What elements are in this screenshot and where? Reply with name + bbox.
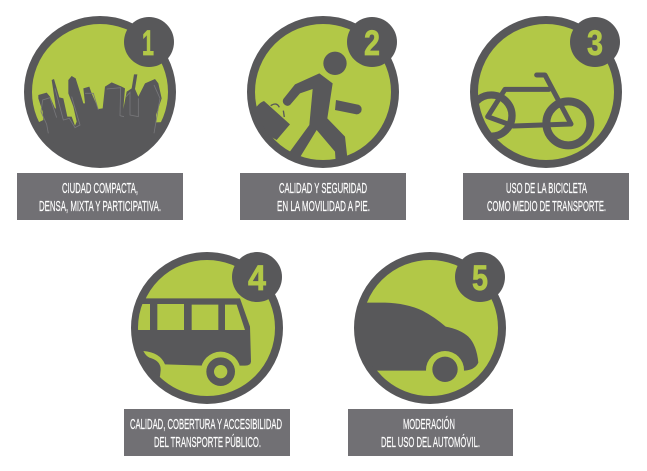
banner: transporte publico: CALIDAD, COBERTURA Y ACCESIBILIDAD xyxy=(130,416,282,433)
badge: number 1: 1 xyxy=(142,24,154,63)
banner: bicicleta xyxy=(463,173,629,220)
badge: number 1 xyxy=(124,17,174,67)
panel 5: automovil xyxy=(348,252,513,456)
banner: automovil: DEL USO DEL AUTOMÓVIL. xyxy=(381,434,480,451)
badge: number 2: 2 xyxy=(364,24,380,63)
icon: bicycle xyxy=(471,20,618,164)
badge: number 5 xyxy=(455,252,505,302)
badge: number 3 xyxy=(570,17,620,67)
banner: movilidad a pie: CALIDAD Y SEGURIDAD xyxy=(279,180,367,197)
icon: walking person with briefcase xyxy=(250,20,395,167)
panel 2: movilidad a pie xyxy=(240,17,406,220)
banner: transporte publico xyxy=(124,409,290,456)
panel 3: bicicleta xyxy=(463,17,629,220)
icon: bus xyxy=(128,256,279,400)
icon: city skyline in circle xyxy=(27,20,173,172)
icon: car xyxy=(352,256,502,400)
badge: number 3: 3 xyxy=(587,24,603,63)
badge: number 4: 4 xyxy=(248,259,266,298)
badge: number 2 xyxy=(347,17,397,67)
banner: automovil xyxy=(348,409,513,456)
banner: ciudad compacta xyxy=(17,173,183,220)
banner: transporte publico: DEL TRANSPORTE PÚBLICO. xyxy=(154,434,261,451)
banner: ciudad compacta: DENSA, MIXTA Y PARTICIPATIVA. xyxy=(39,198,161,215)
banner: movilidad a pie xyxy=(240,173,406,220)
badge: number 5: 5 xyxy=(472,259,488,298)
panel 4: transporte publico xyxy=(124,252,290,456)
banner: ciudad compacta: CIUDAD COMPACTA, xyxy=(62,180,138,197)
banner: movilidad a pie: EN LA MOVILIDAD A PIE. xyxy=(277,198,370,215)
panel 1: ciudad compacta xyxy=(17,17,183,220)
banner: automovil: MODERACIÓN xyxy=(403,416,455,433)
badge: number 4 xyxy=(232,252,282,302)
